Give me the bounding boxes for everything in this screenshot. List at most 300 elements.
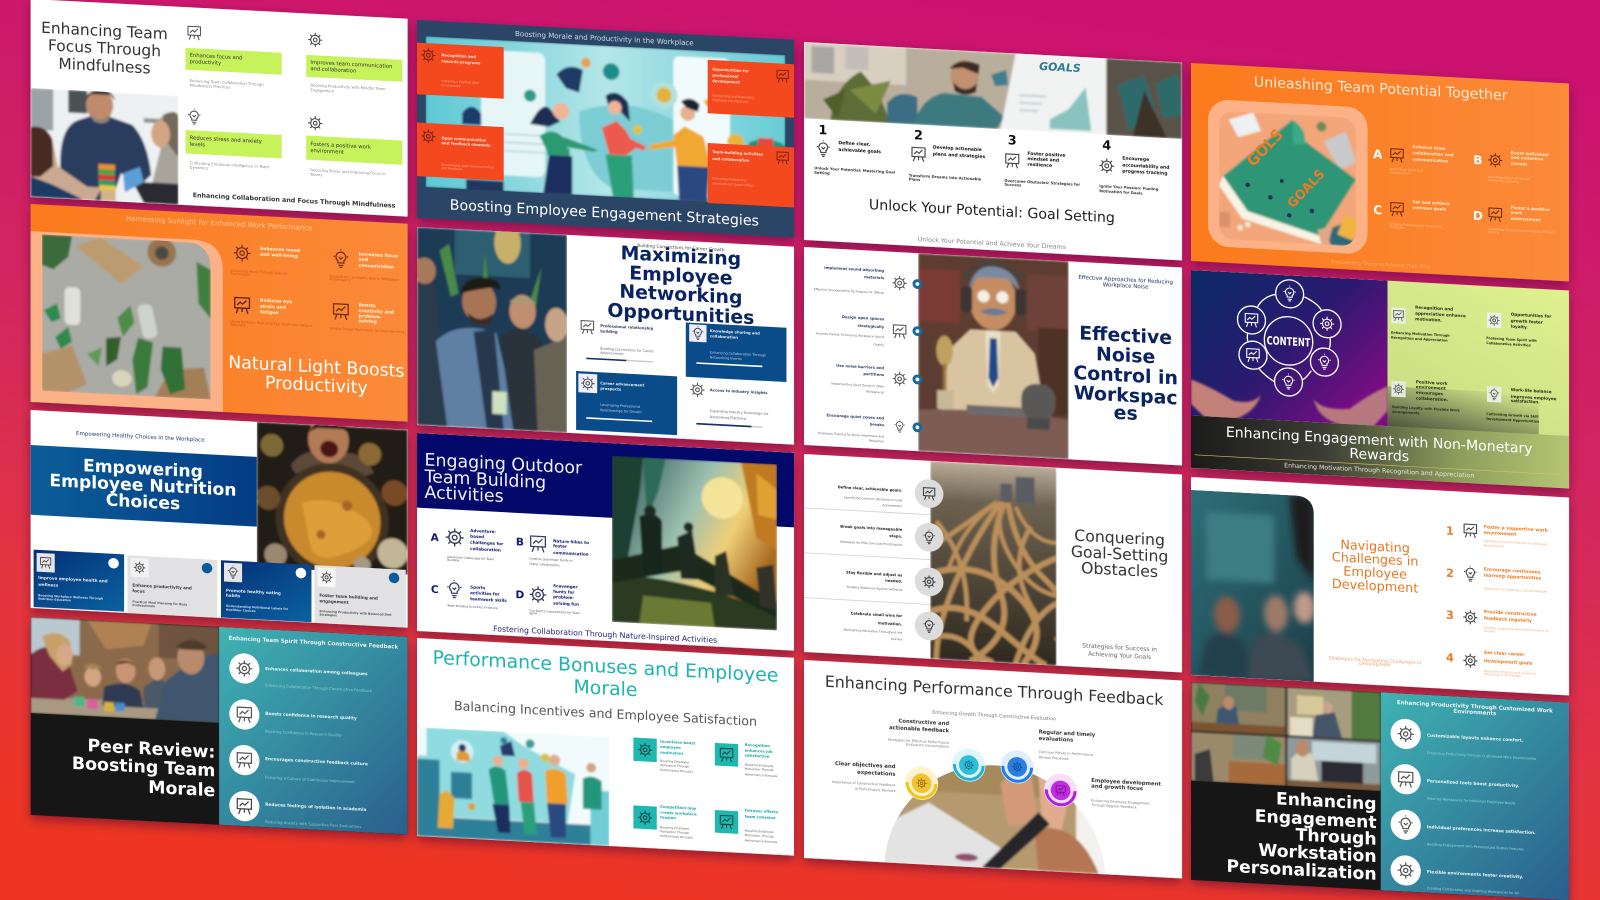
title: Opportunities	[607, 300, 754, 329]
cell: stress and anxiety: Dynamics	[190, 166, 208, 171]
label: constructive feedback	[888, 718, 950, 749]
cell: work-life balance: Cultivating Growth via Skill	[1486, 412, 1539, 419]
item B: morale	[1511, 161, 1527, 167]
step 1: 1	[818, 123, 827, 138]
badge: teal	[952, 748, 985, 783]
benefit: eye strain: strain and	[260, 304, 286, 311]
photo: colleagues around table	[31, 617, 219, 723]
activity C: teamwork skills	[470, 596, 507, 603]
cell: growth: loyalty.	[1511, 324, 1528, 330]
slide: Empowering Employee Nutrition Choices	[31, 401, 408, 628]
item A: Collaboration	[1389, 170, 1410, 175]
cell: team communication: Boosting Productivity with Mindful Team	[310, 83, 386, 91]
cell: positive environment: Teams	[309, 173, 322, 177]
item: layouts: Customizable layouts enhance comfort.	[1427, 733, 1524, 744]
slide: Enhancing Performance Through Feedback	[804, 660, 1182, 878]
activity D: problem-	[553, 594, 574, 600]
cell: career advancement: Relationships for Growth	[600, 408, 642, 414]
cell: incentives: motivation	[660, 751, 683, 756]
cell: relationship building: building	[600, 329, 618, 334]
label: development: Enhancing Employee Engagement	[1091, 799, 1150, 806]
title	[73, 738, 214, 796]
slide: Peer Review: Boosting Team Morale	[31, 617, 408, 835]
card: development: professional	[712, 74, 738, 79]
item D: D	[1473, 209, 1483, 223]
card: team building: Team-building activities	[712, 150, 764, 157]
item: flexible: needed.	[885, 579, 903, 584]
benefit: focus	[330, 249, 399, 282]
item C: Set and achieve	[1413, 199, 1450, 206]
title: Workstation	[1258, 841, 1377, 867]
title band	[31, 445, 257, 527]
step 4: Ignite Your Passion: Fueling	[1099, 184, 1159, 192]
title: Productivity	[265, 373, 368, 399]
card: team building	[314, 565, 406, 627]
activity D: D	[516, 589, 525, 601]
cell: competition: Boosting Employee	[660, 825, 689, 831]
card: productivity and focus	[127, 555, 217, 617]
item: preferences	[1391, 809, 1536, 852]
panel: content diagram on purple gradient	[1191, 270, 1388, 428]
cell: incentives: Motivation Through	[660, 763, 689, 769]
footer subtitle: Fostering Collaboration Through Nature-Inspired Activities	[493, 624, 717, 645]
cell: recognition: enhances job	[745, 749, 773, 754]
title band: Activities	[425, 483, 504, 507]
cell: growth: Collaborative Activities	[1486, 341, 1531, 347]
benefit: mood: Illumination	[230, 272, 250, 277]
item: isolation	[229, 790, 366, 829]
card: development: Recognizing and Rewarding	[712, 94, 754, 100]
item: sound-absorbing: materials	[864, 275, 885, 280]
label: clear objectives: Clear objectives and	[835, 761, 896, 770]
step 2: Transform Dreams into Actionable	[909, 174, 982, 182]
title: Boosting Employee Engagement Strategies	[450, 197, 759, 230]
step 3: Overcome Obstacles: Strategies for	[1004, 179, 1080, 187]
step 2: Develop actionable	[933, 145, 982, 153]
benefit: mood: Enhances mood	[260, 246, 300, 254]
cell: work-life balance: Development Opportunities	[1486, 417, 1539, 424]
item D: Solving	[1488, 230, 1499, 235]
item B	[1473, 148, 1549, 186]
cell: growth: Fostering Team Spirit with	[1486, 336, 1537, 343]
subtitle: Strategies for Navigating Challenges in	[1329, 655, 1421, 666]
benefit: creativity: solving	[359, 318, 377, 325]
cell: positive environment: environment	[1416, 384, 1446, 391]
title band: Engaging Outdoor	[425, 450, 583, 479]
benefit: focus: Increases focus	[359, 251, 398, 260]
item: noise barriers: Implementing Quiet Zones in Open	[831, 382, 884, 388]
label: constructive feedback: actionable feedback	[889, 725, 950, 734]
slide: Navigating Challenges in Employee Development	[1191, 477, 1569, 695]
item: sound-absorbing: Implement sound-absorbing	[824, 266, 884, 273]
activity B: Foster Collaboration	[529, 562, 560, 567]
label: regular evaluations: evaluations	[1039, 736, 1073, 744]
item: feedback culture: Fostering a Culture of Continuous Improvement	[265, 776, 355, 784]
cell: knowledge sharing: collaboration	[710, 334, 738, 340]
item A	[1373, 142, 1453, 178]
title: Morale	[574, 676, 637, 701]
title: Enhancing Engagement with Non-Monetary	[1226, 425, 1533, 457]
title: Personalization	[1226, 857, 1377, 885]
step 4: development goals	[1484, 658, 1533, 667]
card: recognition: rewards programs	[442, 59, 481, 65]
title: Focus Through	[48, 36, 161, 60]
item: flexible: Building Resilience Against Setbacks	[847, 585, 903, 592]
cell: team communication: Improves team communication	[310, 60, 392, 70]
dividers	[804, 508, 930, 604]
item: flexible	[846, 563, 943, 597]
item B: Mentorship Learning	[1488, 178, 1519, 184]
cell: relationship building: Professional relationship	[600, 324, 654, 331]
step 2: plans and strategies	[933, 151, 985, 160]
photo: hand holding pen in semicircle	[880, 755, 1114, 875]
badge: yellow	[905, 766, 938, 801]
item: clear goals: Achievement	[882, 503, 903, 508]
step 3: 3	[1008, 133, 1017, 149]
cell: positive environment: Arrangements	[1392, 410, 1419, 415]
subtitle: Enhancing Growth Through Constructive Evaluation	[932, 710, 1056, 722]
item: preferences: Boosting Engagement with Personalized Station Features	[1427, 842, 1524, 851]
card: health and wellness	[34, 550, 124, 612]
illustration: GOALS pitch	[1219, 111, 1359, 247]
benefit: eye strain: Naturally	[230, 323, 246, 327]
panel heading: Enhancing Team Spirit Through Constructive Feedback	[229, 636, 399, 651]
activity A: challenges for	[470, 540, 504, 546]
item: manageable steps: Strategies for Effective Goal Prioritization	[840, 540, 902, 547]
title band: Employee Nutrition	[49, 471, 236, 501]
slide: Enhancing Engagement Through Workstation Personalization	[1191, 682, 1569, 900]
cell: relationship building: Building Connections for Career	[600, 347, 654, 354]
item: tools: Personalized tools boost productivity.	[1427, 778, 1520, 789]
item: preferences: Individual preferences increase satisfaction.	[1427, 824, 1536, 836]
card: team building	[708, 143, 794, 207]
title: Morale	[148, 778, 215, 801]
activity C: Sports	[470, 584, 486, 590]
card: communication: and feedback channels	[442, 141, 491, 148]
step 4: Encourage	[1122, 156, 1149, 163]
card: healthy eating: Promote healthy eating	[226, 588, 281, 596]
step 2: Plans	[909, 177, 921, 182]
activity B: B	[516, 536, 524, 549]
step 3: resilience	[1027, 162, 1052, 169]
card: productivity and focus: Professionals	[132, 603, 155, 608]
title band: Empowering	[83, 456, 203, 482]
step 1: Identifying Common Barriers to Employee	[1484, 539, 1547, 546]
step 1: Define clear,	[838, 140, 870, 148]
subtitle: Strategies for Success in	[1082, 642, 1157, 653]
cell: fairness: team cohesion	[745, 815, 776, 820]
cell: recognition: Enhancing Motivation Through	[1391, 331, 1450, 338]
item: feedback culture	[229, 744, 368, 785]
cell: fairness	[715, 807, 779, 844]
title: Noise	[1096, 343, 1155, 368]
item: quiet zones: Encourage quiet zones and	[827, 413, 884, 421]
step 3: Foster positive	[1027, 151, 1065, 159]
activity C: C	[431, 584, 439, 596]
cell: stress and anxiety	[186, 108, 282, 174]
cell: industry insights: Access to Industry Insights	[710, 388, 768, 395]
activity A: Building	[447, 558, 459, 563]
item: celebrate wins: motivation.	[878, 621, 903, 627]
illustration: GOALS pitch: GOLS	[1243, 125, 1287, 170]
title: Enhancing	[1276, 789, 1377, 815]
item D: environment	[1511, 216, 1541, 222]
header: Building Connections for Career Growth	[637, 243, 725, 253]
title	[607, 241, 754, 329]
header: Harnessing Sunlight for Enhanced Work Performance	[126, 214, 312, 232]
title: Effective	[1079, 322, 1172, 349]
activity C	[431, 578, 507, 611]
step 2: 2	[914, 128, 923, 144]
cell: positive environment: Reducing Stress and Improving Focus in	[310, 168, 386, 176]
step 2: 2	[1446, 566, 1454, 580]
item C	[1373, 197, 1450, 232]
benefit: mood: and well-being	[260, 252, 298, 260]
item: feedback culture: Encourages constructive feedback culture	[265, 756, 368, 767]
panel: content diagram on purple gradient: CONTENT	[1267, 333, 1311, 350]
step 4	[1099, 138, 1169, 197]
photo: blurred colleagues	[1191, 490, 1315, 682]
label: development: Through Regular Feedback	[1090, 803, 1137, 809]
step 1: Development	[1484, 543, 1505, 549]
cell: team communication	[306, 32, 402, 97]
item: celebrate wins: Celebrate small wins for	[851, 611, 902, 618]
step 4: 4	[1102, 138, 1111, 154]
label: clear objectives: expectations	[857, 770, 895, 778]
step 4: Milestones & Challenges	[1484, 672, 1521, 678]
item A: Enhance team	[1413, 144, 1446, 151]
title: Obstacles	[1081, 558, 1158, 581]
title: Enhancing Performance Through Feedback	[825, 672, 1164, 709]
slide: Enhancing Team Focus Through Mindfulness	[31, 0, 408, 217]
item: isolation: Reducing Anxiety with Supportive Peer Evaluations	[265, 820, 361, 829]
cell: recognition	[1391, 303, 1466, 344]
cell: positive environment: Building Loyalty with Flexible Work	[1392, 405, 1461, 413]
item A: A	[1373, 147, 1383, 162]
illustration: team handshake	[426, 36, 790, 207]
benefit: eye strain: Reduces eye	[260, 298, 292, 305]
title: Workspac	[1074, 382, 1178, 409]
card: health and wellness: Nutrition Education	[38, 597, 71, 602]
title: Engagement	[1255, 807, 1377, 833]
activity B: Creative Scavenger Hunts to	[529, 557, 573, 563]
title: Peer Review:	[87, 736, 215, 763]
cell: focus and productivity	[186, 26, 282, 92]
cell: career advancement: Leveraging Professional	[600, 403, 640, 409]
item: tools	[1391, 763, 1520, 806]
activity D	[516, 581, 580, 618]
item: tools: Tailoring Workspaces for Individual Employee Needs	[1426, 797, 1516, 805]
card: recognition: Fostering a Positive Work	[442, 79, 480, 85]
header: Boosting Morale and Productivity in the Workplace	[515, 29, 694, 47]
item C: common goals	[1413, 205, 1447, 212]
benefit: creativity: creativity and	[359, 308, 394, 316]
cell: work-life balance: satisfaction.	[1511, 398, 1540, 405]
item: flexible environments	[1391, 855, 1524, 896]
activity A: A	[431, 532, 440, 544]
photo: man writing goals on whiteboard: GOALS	[1039, 60, 1081, 75]
card: development: development	[712, 79, 740, 85]
card: health and wellness: Improve employee health and	[38, 575, 108, 584]
benefit: focus: concentration	[359, 263, 394, 271]
header	[1078, 275, 1173, 292]
card: recognition: Recognition and	[442, 53, 476, 59]
step 3	[1446, 607, 1550, 637]
card: team building: engagement	[319, 598, 349, 605]
item: quiet zones	[818, 413, 921, 445]
footer subtitle: Enhancing Collaboration and Focus Through Mindfulness	[193, 192, 396, 210]
cell: knowledge sharing: Knowledge sharing and	[710, 329, 760, 336]
subtitle: Development	[1359, 661, 1391, 669]
cell: stress and anxiety: levels	[190, 142, 205, 148]
title: Navigating	[1340, 538, 1410, 557]
label: regular evaluations	[1039, 729, 1096, 762]
card: healthy eating: Healthier Choices	[226, 608, 256, 613]
cell: career advancement: Career advancement	[600, 381, 644, 388]
title: Through	[1296, 825, 1377, 850]
label: clear objectives	[832, 761, 896, 793]
item B: B	[1473, 153, 1483, 167]
activity A: Adventure Challenges for Team	[447, 555, 494, 561]
activity A	[431, 526, 504, 565]
cell: team communication: and collaboration	[310, 66, 356, 75]
label: clear objectives: in Performance Reviews	[855, 787, 896, 793]
item: manageable steps: Break goals into manageable	[840, 525, 903, 532]
item: sound-absorbing	[814, 265, 921, 297]
card: communication: Open communication	[442, 136, 487, 143]
photo: winding highways	[930, 461, 1064, 666]
cell: competition: Motivation Through	[660, 829, 689, 835]
title: Boosting Team	[72, 754, 215, 781]
cell: knowledge sharing: Networking Events	[710, 355, 742, 361]
activity B: Nature hikes to	[553, 538, 589, 545]
item A: Ignite Team Spirit and	[1389, 167, 1423, 173]
slide: Natural Light Boosts Productivity	[31, 204, 408, 422]
step 3: Success	[1004, 183, 1022, 188]
item B: Unlocking Potential Through	[1488, 175, 1530, 181]
cell: competition	[633, 804, 697, 840]
benefit: eye strain	[230, 296, 312, 328]
item: manageable steps: steps.	[889, 534, 903, 539]
item: open spaces: Design open spaces	[842, 315, 885, 321]
item: celebrate wins: Journey	[890, 637, 902, 641]
title: Development	[1332, 577, 1418, 597]
item B: Boost individual	[1511, 150, 1549, 157]
cell: industry insights: Expanding Industry Knowledge via	[710, 409, 768, 416]
cell: positive environment: collaboration.	[1416, 395, 1449, 402]
title	[1226, 787, 1377, 885]
title: Employee	[1343, 564, 1407, 583]
cell: fairness: Boosting Employee	[745, 829, 774, 834]
photo: clay figure with headphones and gavel	[918, 253, 1069, 459]
cell: recognition: satisfaction	[745, 754, 770, 759]
cell: work-life balance: improves employee	[1511, 394, 1557, 401]
cell: team communication: Engagement	[310, 88, 335, 94]
title	[230, 355, 404, 397]
badge: blue	[1001, 749, 1034, 784]
subtitle: Achieving Your Goals	[1088, 651, 1151, 661]
card: team building: Foster team building and	[319, 593, 378, 601]
item: collaboration: Enhances collaboration among colleagues	[265, 666, 368, 677]
title: Unleashing Team Potential Together	[1254, 74, 1508, 104]
slide: Performance Bonuses and Employee Morale	[417, 638, 794, 856]
step 4: accountability and	[1122, 162, 1169, 171]
item D: Cultivating Innovation and Creative Problem-	[1488, 227, 1556, 235]
item: confidence: Boosting Confidence in Research Quality	[265, 730, 342, 738]
step 4: 4	[1446, 650, 1454, 665]
header: Effective Approaches for Reducing	[1078, 275, 1173, 286]
cell: positive environment	[1391, 378, 1461, 418]
item: confidence	[229, 699, 357, 738]
peach frame	[1208, 99, 1368, 255]
teal panel	[1381, 692, 1569, 900]
item: flexible: Stay flexible and adjust as	[846, 571, 903, 578]
benefit: creativity	[330, 301, 404, 334]
item D: work	[1511, 210, 1523, 215]
item: open spaces	[816, 314, 921, 349]
card: recognition: Environment	[442, 83, 461, 88]
item: noise barriers	[831, 363, 921, 396]
photo: networking conversation	[413, 217, 568, 433]
cell: positive environment: environment	[310, 148, 344, 156]
subtitle: Enhancing Motivation Through Recognition and Appreciation	[1284, 462, 1474, 480]
step 2: learning opportunities	[1484, 573, 1541, 582]
title: Conquering	[1074, 526, 1165, 550]
card: team building: Development Opportunities	[712, 181, 754, 188]
cell: competition: tension	[660, 815, 676, 820]
item C: Strategies	[1389, 225, 1405, 230]
activity A: based	[470, 534, 484, 539]
title	[42, 22, 166, 74]
label: regular evaluations: Common Pitfalls in Performance	[1039, 750, 1093, 757]
card: team building: and collaboration	[712, 157, 750, 163]
cell: positive environment	[306, 116, 402, 182]
title: Unlock Your Potential: Goal Setting	[869, 197, 1115, 226]
cell: positive environment: encourages	[1416, 390, 1444, 396]
cell: fairness: Fairness affects	[745, 809, 779, 814]
footer subtitle: Unlock Your Potential and Achieve Your Dreams	[918, 236, 1066, 251]
card: communication	[417, 123, 504, 181]
benefit: creativity: problem-	[359, 313, 382, 320]
activity C: activities for	[470, 590, 501, 597]
cell: competition: Competition may	[660, 805, 697, 811]
step 1	[814, 123, 895, 179]
benefit: focus: Boost Brain: Sunlight's Role in Workplace	[330, 274, 399, 282]
slide: Effective Noise Control in Workspaces	[804, 247, 1182, 465]
activity D: solving fun	[553, 600, 579, 607]
label: development	[1090, 778, 1161, 811]
cell: recognition: Recognition and Appreciation	[1391, 336, 1448, 343]
teal panel	[219, 627, 408, 835]
item: flexible environments: Creating Comfortable and Inspiring Workspaces for All	[1427, 886, 1519, 895]
card: productivity and focus: Enhance productivity and	[132, 582, 192, 591]
card: development	[708, 60, 794, 118]
slide: Engaging Outdoor Team Building Activities	[417, 433, 794, 651]
step 3: feedback regularly	[1484, 616, 1532, 624]
step 1: achievable goals	[838, 147, 881, 155]
step 1: Unlock Your Potential: Mastering Goal	[814, 166, 895, 175]
step 1: Setting	[814, 171, 830, 176]
title	[1226, 425, 1533, 472]
item D	[1473, 203, 1556, 238]
label: constructive feedback: Constructive and	[899, 718, 949, 727]
step 3	[1004, 133, 1080, 191]
item: isolation: Reduces feelings of isolation in academia	[265, 802, 366, 813]
subtitle	[1082, 642, 1157, 661]
item: open spaces: strategically	[858, 324, 885, 329]
step 3: Building Supportive Work Environments for	[1484, 626, 1550, 633]
label: regular evaluations: Regular and timely	[1039, 729, 1096, 739]
